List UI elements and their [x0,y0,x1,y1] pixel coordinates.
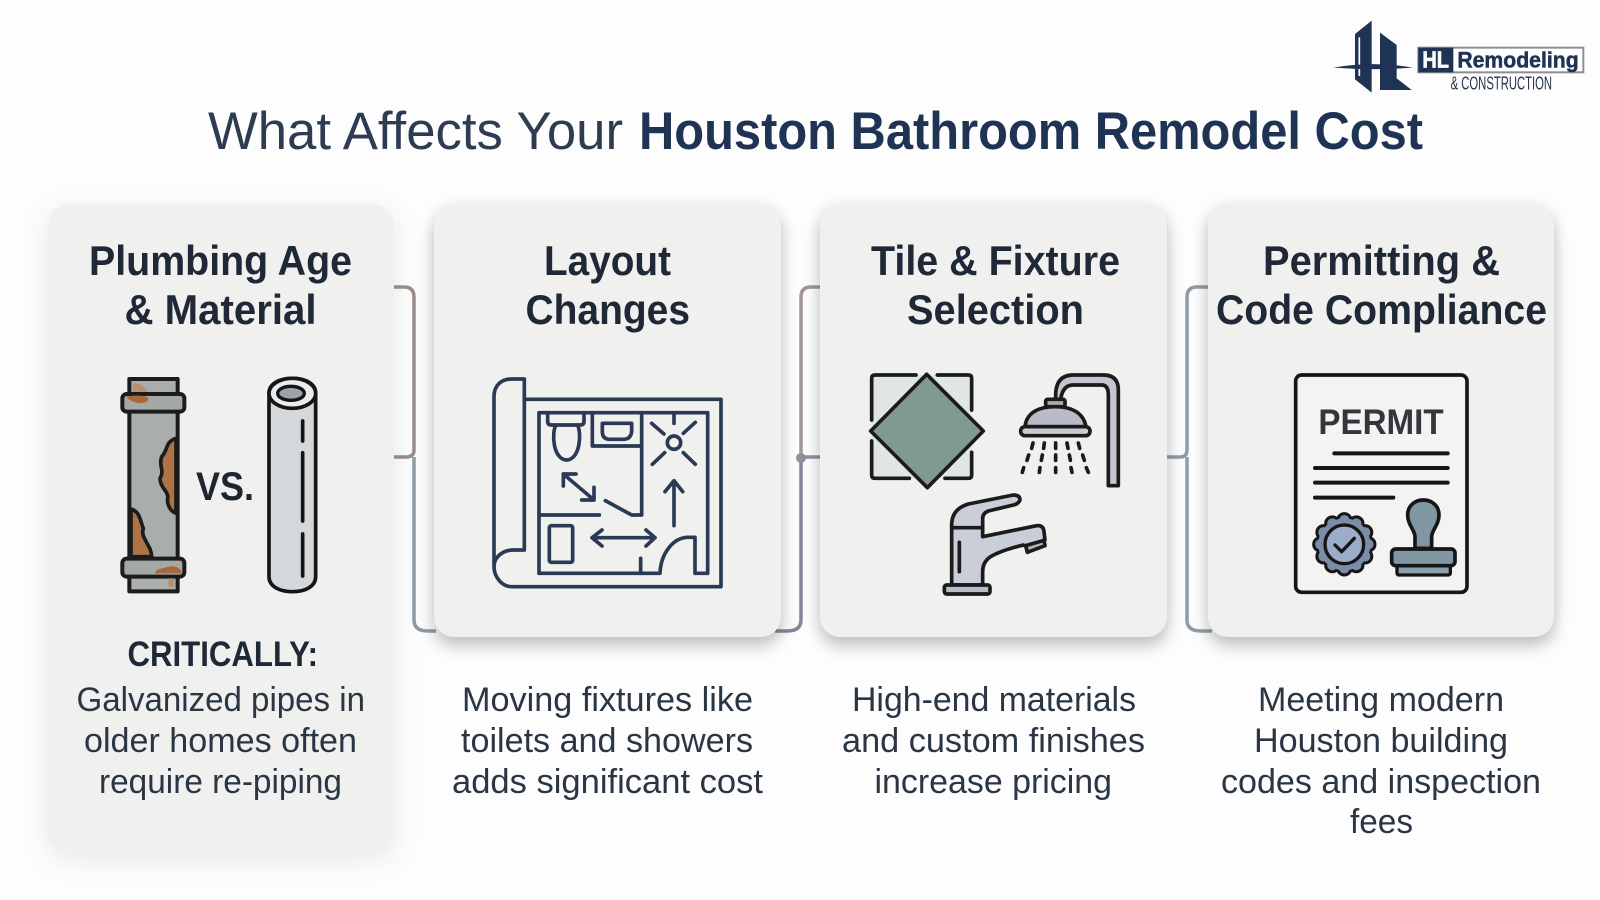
logo: HL Remodeling & Construction [1333,21,1583,93]
panel: layout changes [434,205,781,801]
heading: permitting [1216,237,1547,333]
connector: plumbing to layout [394,287,436,631]
title [208,102,1423,161]
heading: layout changes: Changes [526,286,690,333]
heading: tile and fixture [871,237,1120,333]
panel: plumbing age and material [48,205,394,853]
icon: permit document [1296,375,1467,592]
text: permitting description: fees [1350,803,1413,841]
logo: HL Remodeling & Construction: HL [1422,47,1449,73]
heading: tile and fixture: Tile & Fixture [871,237,1120,284]
text: permitting description [1221,681,1541,841]
text: permitting description: Meeting modern [1258,681,1504,719]
text: layout description: adds significant cost [452,763,764,801]
text: critically note: older homes often [84,722,357,760]
label: vs: VS. [196,465,254,509]
heading: tile and fixture: Selection [907,286,1084,333]
text: tile description [842,681,1145,801]
icon: floor plan blueprint [494,379,721,587]
text: tile description: High-end materials [852,681,1136,719]
title: What Affects Your [208,102,623,161]
text: critically note: require re-piping [99,763,342,801]
panel: permitting and code compliance [1208,205,1554,841]
heading: permitting: Permitting & [1263,237,1500,284]
heading: plumbing age: Plumbing Age [89,237,352,284]
text: tile description: increase pricing [874,763,1112,801]
panel: tile and fixture selection [820,205,1167,801]
text: permitting description: Houston building [1254,722,1508,760]
heading: layout changes: Layout [544,237,671,284]
text: layout description: toilets and showers [461,722,753,760]
connector: layout to tile [775,287,822,631]
logo: HL Remodeling & Construction: Remodeling [1457,47,1579,72]
icon: permit document: PERMIT [1318,403,1444,442]
text: critically note: CRITICALLY: [128,635,318,674]
connector: tile to permitting [1167,287,1212,631]
icon: corroded pipe vs new pipe [122,378,316,592]
heading: plumbing age [89,237,352,333]
text: tile description: and custom finishes [842,722,1145,760]
heading: permitting: Code Compliance [1216,286,1547,333]
text: layout description: Moving fixtures like [462,681,753,719]
text: permitting description: codes and inspection [1221,763,1541,801]
heading: plumbing age: & Material [124,286,316,333]
heading: layout changes [526,237,690,333]
title: Houston Bathroom Remodel Cost [639,102,1423,161]
text: critically note: Galvanized pipes in [76,681,365,719]
icon: tile, shower head and faucet [871,374,1118,594]
text: layout description [452,681,764,801]
text: critically note [76,635,365,801]
